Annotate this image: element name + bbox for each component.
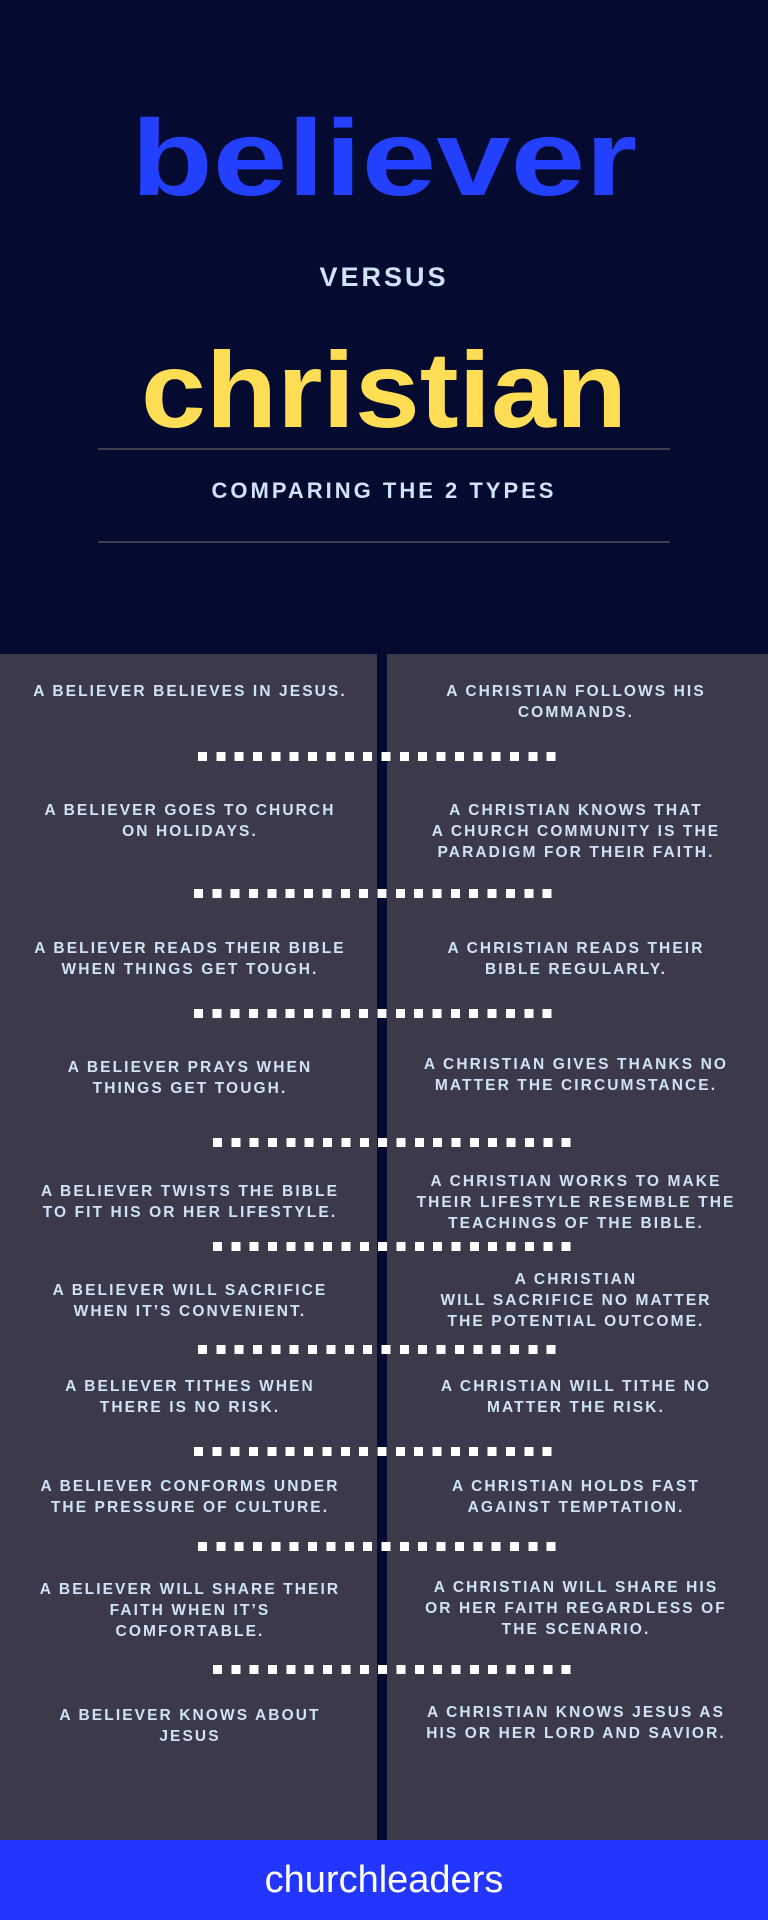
text: A CHRISTIAN WILL SHARE HIS <box>434 1579 718 1596</box>
text: HIS OR HER LORD AND SAVIOR. <box>426 1725 726 1742</box>
text: MATTER THE RISK. <box>487 1399 665 1416</box>
row 4 <box>68 1059 312 1097</box>
text: A CHRISTIAN WILL TITHE NO <box>441 1378 711 1395</box>
row 10: A BELIEVER KNOWS ABOUT <box>59 1707 321 1724</box>
row 7: THERE IS NO RISK. <box>100 1399 280 1416</box>
row 4: THINGS GET TOUGH. <box>93 1080 287 1097</box>
row 10: JESUS <box>159 1728 221 1745</box>
row 3 <box>34 940 346 978</box>
row 7: A BELIEVER TITHES WHEN <box>65 1378 315 1395</box>
text: PARADIGM FOR THEIR FAITH. <box>438 844 714 861</box>
text: AGAINST TEMPTATION. <box>468 1499 684 1516</box>
subtitle: COMPARING THE 2 TYPES <box>212 478 556 503</box>
center divider <box>377 654 387 1840</box>
text: A CHRISTIAN HOLDS FAST <box>452 1478 700 1495</box>
row 8: A BELIEVER CONFORMS UNDER <box>40 1478 340 1495</box>
row 2: ON HOLIDAYS. <box>122 823 258 840</box>
text: A CHRISTIAN GIVES THANKS NO <box>424 1056 728 1073</box>
row 2 <box>44 802 336 840</box>
row 6: A BELIEVER WILL SACRIFICE <box>53 1282 327 1299</box>
text: BIBLE REGULARLY. <box>485 961 667 978</box>
text: WILL SACRIFICE NO MATTER <box>440 1292 712 1309</box>
footer brand: churchleaders <box>265 1859 503 1901</box>
row 9 <box>40 1581 340 1640</box>
text: A CHRISTIAN <box>515 1271 637 1288</box>
versus label: VERSUS <box>319 262 449 292</box>
row 3: A BELIEVER READS THEIR BIBLE <box>34 940 346 957</box>
text: MATTER THE CIRCUMSTANCE. <box>435 1077 717 1094</box>
text: A CHRISTIAN WORKS TO MAKE <box>430 1173 722 1190</box>
text: A CHRISTIAN KNOWS THAT <box>449 802 703 819</box>
row 10 <box>59 1707 321 1745</box>
row 9: FAITH WHEN IT’S <box>110 1602 270 1619</box>
row 8 <box>40 1478 340 1516</box>
text: A CHRISTIAN KNOWS JESUS AS <box>427 1704 725 1721</box>
row 3: WHEN THINGS GET TOUGH. <box>62 961 318 978</box>
row 1: A BELIEVER BELIEVES IN JESUS. <box>33 683 347 700</box>
title: believer: believer <box>131 97 637 218</box>
row 4: A BELIEVER PRAYS WHEN <box>68 1059 312 1076</box>
text: TEACHINGS OF THE BIBLE. <box>448 1215 704 1232</box>
header panel <box>0 0 768 654</box>
text: THE SCENARIO. <box>502 1621 650 1638</box>
row 2: A BELIEVER GOES TO CHURCH <box>44 802 336 819</box>
row 6: WHEN IT’S CONVENIENT. <box>74 1303 306 1320</box>
row 9: COMFORTABLE. <box>116 1623 264 1640</box>
row 9: A BELIEVER WILL SHARE THEIR <box>40 1581 340 1598</box>
title: christian: christian <box>141 329 627 450</box>
row 5: A BELIEVER TWISTS THE BIBLE <box>41 1183 339 1200</box>
text: OR HER FAITH REGARDLESS OF <box>425 1600 727 1617</box>
row 7 <box>65 1378 315 1416</box>
text: COMMANDS. <box>518 704 634 721</box>
footer brand <box>0 1840 768 1920</box>
text: THE POTENTIAL OUTCOME. <box>448 1313 704 1330</box>
text: A CHRISTIAN FOLLOWS HIS <box>446 683 706 700</box>
row 5: TO FIT HIS OR HER LIFESTYLE. <box>43 1204 337 1221</box>
text: A CHURCH COMMUNITY IS THE <box>432 823 720 840</box>
row 5 <box>41 1183 339 1221</box>
row 8: THE PRESSURE OF CULTURE. <box>51 1499 329 1516</box>
text: THEIR LIFESTYLE RESEMBLE THE <box>417 1194 735 1211</box>
row 6 <box>53 1282 327 1320</box>
text: A CHRISTIAN READS THEIR <box>448 940 704 957</box>
